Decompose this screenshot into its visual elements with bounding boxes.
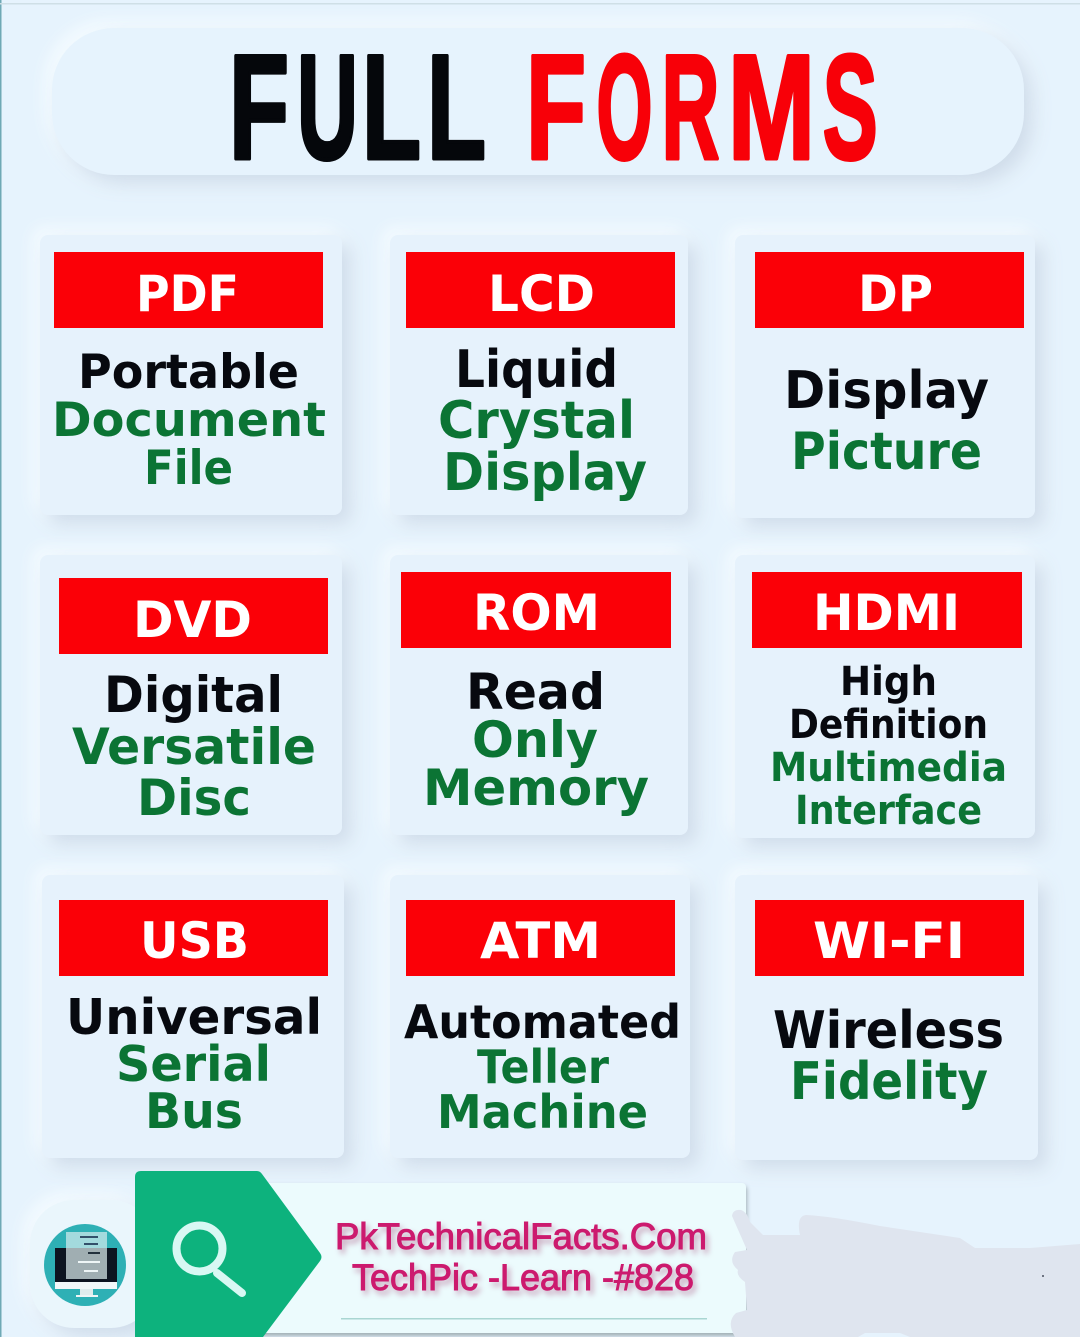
panel: HDMI: HDMI <box>813 584 960 642</box>
panel: LCD: Liquid <box>455 340 618 400</box>
title: F <box>526 24 586 190</box>
icon: magnifying glass <box>176 1226 242 1293</box>
panel: ROM <box>390 555 688 835</box>
panel: DVD: Digital <box>104 666 283 724</box>
panel: LCD: Display <box>443 443 647 503</box>
panel: USB: Bus <box>145 1083 243 1140</box>
panel: USB: USB <box>140 912 249 970</box>
title <box>229 24 878 190</box>
footer text: PkTechnicalFacts.Com <box>335 1216 707 1257</box>
panel: WI-FI: Wireless <box>773 1001 1004 1061</box>
title: R <box>662 24 720 190</box>
title: S <box>823 24 878 190</box>
panel: ROM: ROM <box>473 584 600 642</box>
title: L <box>427 24 486 190</box>
panel: PDF: Portable <box>78 345 299 400</box>
panel: DP: Picture <box>791 422 982 482</box>
panel: DVD: Disc <box>137 769 251 827</box>
panel: LCD <box>390 235 688 515</box>
panel: PDF <box>40 235 342 515</box>
panel: USB: Serial <box>116 1036 271 1093</box>
title: M <box>728 24 815 190</box>
footer text: TechPic -Learn -#828 <box>352 1257 694 1298</box>
panel: ROM: Only <box>472 711 598 769</box>
panel: DP: Display <box>784 361 989 421</box>
panel: USB: Universal <box>66 989 322 1046</box>
panel: ATM: ATM <box>480 912 601 970</box>
panel: HDMI: Definition <box>789 702 988 748</box>
green tag <box>135 1171 322 1337</box>
panel: DVD <box>40 555 342 835</box>
title: L <box>362 24 421 190</box>
panel: DVD: Versatile <box>72 718 316 776</box>
panel: DP <box>735 235 1035 518</box>
panel: ATM: Machine <box>437 1085 648 1139</box>
panel: WI-FI <box>735 875 1038 1160</box>
panel: HDMI: Interface <box>795 788 982 834</box>
panel: HDMI <box>735 555 1035 838</box>
title panel <box>52 24 1024 190</box>
icon: computer badge <box>44 1224 126 1306</box>
panel: WI-FI: WI-FI <box>813 912 965 970</box>
panel: USB <box>42 875 344 1158</box>
panel: DVD: DVD <box>133 591 252 649</box>
panel: HDMI: Multimedia <box>770 745 1007 791</box>
panel: WI-FI: Fidelity <box>790 1052 988 1112</box>
panel: ATM: Teller <box>477 1040 609 1094</box>
title: F <box>229 24 289 190</box>
footer banner <box>30 1171 746 1337</box>
gray smudge area <box>731 1210 1080 1337</box>
panel: ROM: Memory <box>423 759 649 817</box>
panel: PDF: PDF <box>136 265 239 323</box>
panel: ATM: Automated <box>404 995 681 1049</box>
panel: ATM <box>390 875 690 1158</box>
panel: LCD: LCD <box>488 265 595 323</box>
title: U <box>297 24 358 190</box>
panel: PDF: Document <box>52 393 326 448</box>
panel: DP: DP <box>858 265 933 323</box>
panel: LCD: Crystal <box>438 391 635 451</box>
panel: HDMI: High <box>840 659 937 705</box>
footer text <box>335 1216 707 1298</box>
panel: ROM: Read <box>466 663 605 721</box>
title: O <box>596 24 652 190</box>
panel: PDF: File <box>144 441 233 496</box>
